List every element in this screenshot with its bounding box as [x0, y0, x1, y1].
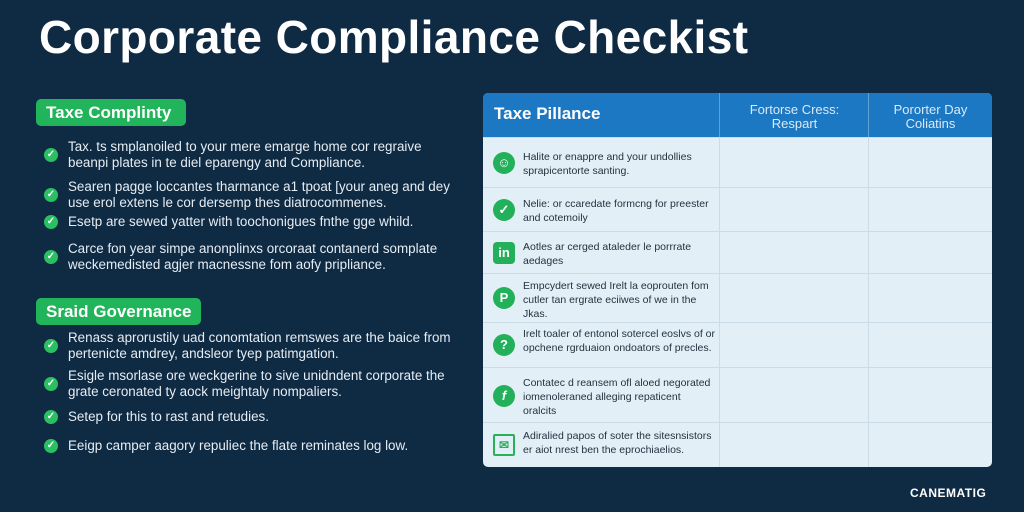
item 1: Tax. ts smplanoiled to your mere emarge home cor regraive beanpi plates in te diel eparengy and Compliance.: [68, 139, 422, 170]
header: [483, 93, 992, 137]
item 6: ✓: [47, 378, 55, 389]
header: Fortorse Cress:: [750, 102, 839, 117]
row 2: Nelie: or ccaredate formcng for preester and cotemoily: [523, 198, 709, 224]
row 1: [483, 137, 992, 187]
row 4: [483, 273, 992, 322]
row 2: ✓: [499, 202, 509, 217]
header: Pororter Day: [894, 102, 967, 117]
list: governance items: [44, 330, 451, 453]
header: Coliatins: [906, 116, 955, 131]
row 1: Halite or enappre and your undollies sprapicentorte santing.: [523, 151, 692, 177]
item 6: Esigle msorlase ore weckgerine to sive unidndent corporate the grate ceronated ty aock meightaly nompaliers.: [68, 368, 445, 399]
badge: Taxe Complinty: Taxe Complinty: [46, 103, 171, 122]
item 4: ✓: [47, 251, 55, 262]
row 4: P: [500, 290, 508, 305]
row 7: Adiralied papos of soter the sitesnsistors er aiot nrest ben the eprochiaelios.: [523, 430, 712, 456]
item 4: Carce fon year simpe anonplinxs orcoraat contanerd somplate weckemedisted agjer macnessne fom aofy pripliance.: [68, 241, 437, 272]
item 2: ✓: [47, 189, 55, 200]
row 3: [483, 231, 992, 273]
table panel: [483, 93, 992, 467]
list: tax items: [44, 139, 450, 272]
item 8: ✓: [47, 440, 55, 451]
row 6: f: [502, 388, 506, 403]
row 4: Empcydert sewed Irelt la eoprouten fom cutler tan ergrate eciiwes of we in the Jkas.: [523, 280, 709, 320]
item 7: Setep for this to rast and retudies.: [68, 409, 269, 424]
badge: Sraid Governance: Sraid Governance: [46, 302, 192, 321]
row 7: [483, 422, 992, 467]
item 2: Searen pagge loccantes tharmance a1 tpoat [your aneg and dey use erol extens le cor dersemp thes diatrocommenes.: [68, 179, 450, 210]
header: Respart: [772, 116, 817, 131]
header: Taxe Pillance: [494, 104, 600, 123]
row 3: Aotles ar cerged ataleder le porrrate aedages: [523, 241, 691, 267]
item 8: Eeigp camper aagory repuliec the flate reminates log low.: [68, 438, 408, 453]
row 7: ✉: [499, 438, 509, 452]
brand label: CANEMATIG: [910, 486, 986, 500]
item 5: ✓: [47, 340, 55, 351]
row 6: Contatec d reansem ofl aloed negorated iomenoleraned alleging repaticent oralcits: [523, 377, 710, 417]
badge: Taxe Complinty: [36, 99, 186, 126]
row 5: [483, 322, 992, 367]
title: Corporate Compliance Checkist: [39, 11, 748, 63]
row 6: [483, 367, 992, 422]
row 5: ?: [500, 337, 508, 352]
item 3: ✓: [47, 216, 55, 227]
row 1: ☺: [497, 155, 511, 170]
item 1: ✓: [47, 149, 55, 160]
item 3: Esetp are sewed yatter with toochonigues fnthe gge whild.: [68, 214, 413, 229]
badge: Sraid Governance: [36, 298, 201, 325]
row 5: Irelt toaler of entonol sotercel eoslvs of or opchene rgrduaion ondoators of precles.: [523, 328, 715, 354]
item 7: ✓: [47, 411, 55, 422]
row 3: in: [498, 245, 510, 260]
row 2: [483, 187, 992, 231]
item 5: Renass aprorustily uad conomtation remswes are the baice from pertenicte amdrey, andsleor tyep patimgation.: [68, 330, 451, 361]
